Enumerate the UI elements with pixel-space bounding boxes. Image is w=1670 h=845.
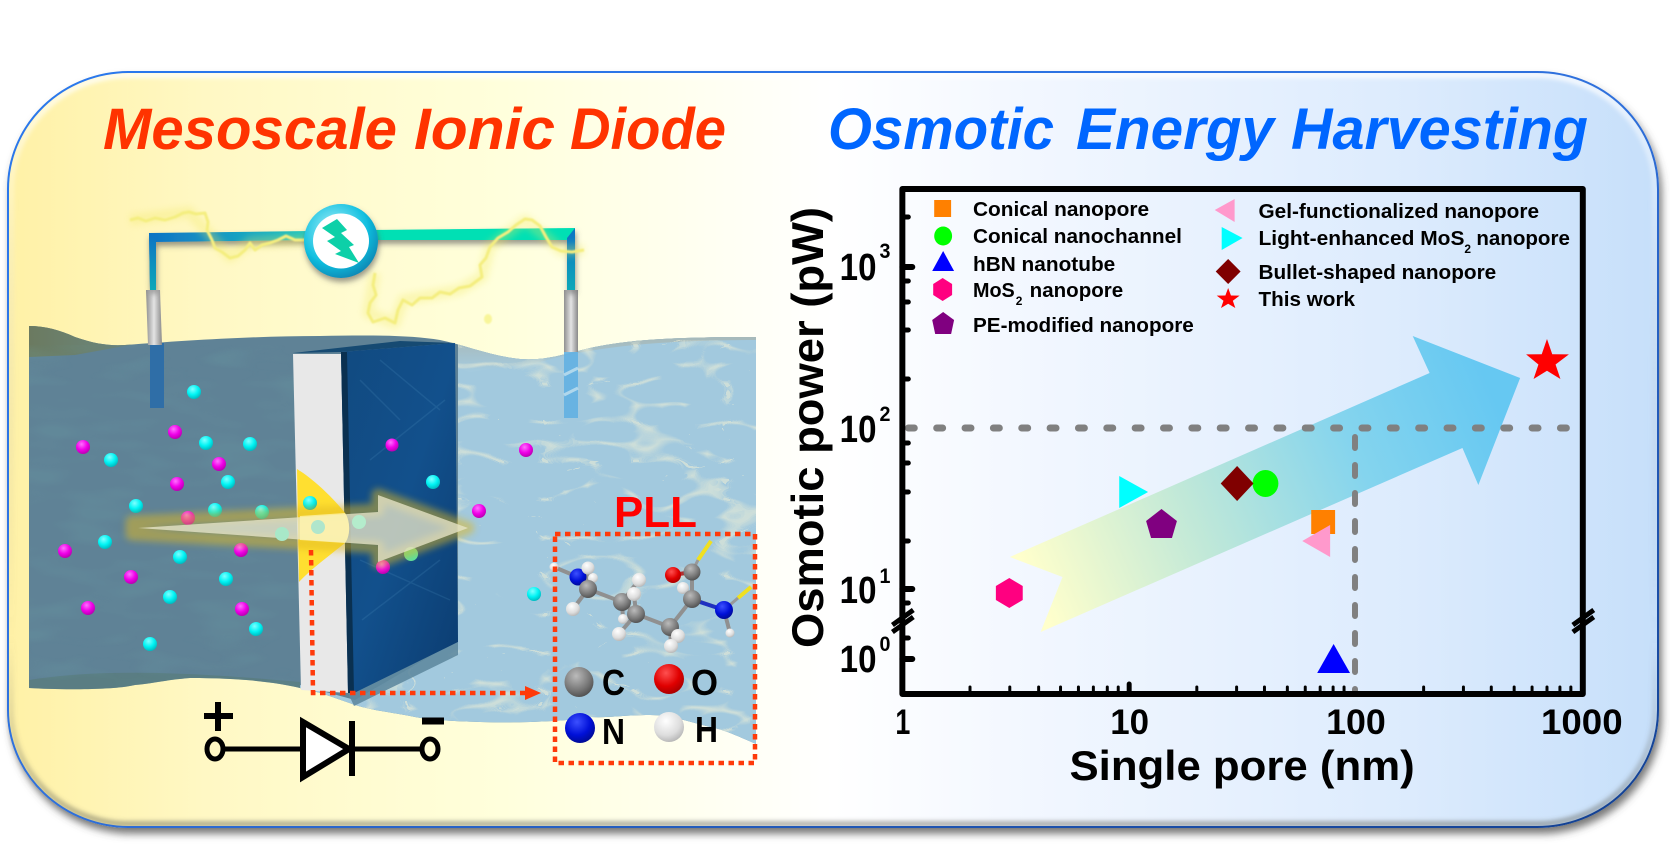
point: hBN nanotube — [1317, 644, 1350, 673]
legend: light-enhanced MoS2 nanopore: 2 — [1464, 242, 1471, 256]
atom legend: H — [695, 709, 718, 750]
point: conical nanochannel — [1253, 470, 1278, 497]
point: PE-modified — [1146, 509, 1177, 538]
y tick labels: 3 — [879, 240, 890, 263]
data points — [996, 339, 1569, 673]
legend: gel-functionalized nanopore: Gel-functionalized nanopore — [1258, 201, 1539, 223]
y axis title: Osmotic power (pW) — [782, 207, 833, 648]
title: Osmotic Energy Harvesting: Energy — [1076, 97, 1277, 162]
dotted pointer arrow — [311, 550, 541, 700]
red dotted box — [555, 534, 755, 763]
x tick labels: 1000 — [1541, 703, 1623, 742]
ion particles — [58, 385, 541, 651]
legend: MoS2 nanopore: 2 — [1016, 294, 1023, 308]
axis ticks — [902, 217, 1571, 694]
electrode left — [146, 290, 164, 408]
legend: conical nanochannel: Conical nanochannel — [973, 226, 1182, 248]
point: this work star — [1526, 339, 1569, 379]
legend: light-enhanced MoS2 nanopore — [1222, 227, 1570, 256]
glowing yellow current traces — [130, 212, 584, 324]
title: Osmotic Energy Harvesting — [828, 97, 1588, 162]
panel: osmotic power chart — [782, 189, 1623, 789]
y tick labels: 1 — [879, 565, 891, 588]
diode symbol — [204, 702, 444, 777]
point: MoS2 nanopore — [996, 578, 1023, 608]
y tick labels: 10 — [840, 570, 876, 612]
circuit wire — [149, 228, 575, 290]
legend: light-enhanced MoS2 nanopore: nanopore — [1476, 228, 1570, 250]
legend: MoS2 nanopore: MoS — [973, 280, 1015, 302]
PLL molecule — [550, 541, 751, 653]
title: Mesoscale Ionic Diode: Ionic — [414, 97, 555, 162]
legend: light-enhanced MoS2 nanopore: Light-enhanced MoS — [1258, 228, 1464, 250]
y tick labels: 2 — [879, 403, 890, 426]
legend: conical nanopore: Conical nanopore — [973, 199, 1149, 221]
ion flow arrow — [132, 495, 468, 562]
y tick labels: 10 — [840, 639, 876, 681]
atom legend: C — [602, 662, 625, 703]
plot frame — [902, 189, 1583, 694]
point: light-enhanced MoS2 — [1119, 476, 1148, 508]
x tick labels — [895, 703, 1623, 742]
atom legend — [564, 662, 718, 752]
legend: hBN nanotube: hBN nanotube — [973, 254, 1115, 276]
legend: this work — [1217, 288, 1356, 311]
PLL heading: PLL — [614, 488, 697, 537]
point: conical nanopore — [1311, 510, 1335, 534]
atom legend: N — [602, 711, 625, 752]
point: bullet-shaped — [1221, 466, 1254, 501]
electrode right — [564, 290, 578, 418]
x tick labels: 10 — [1110, 703, 1149, 742]
y tick labels: 10 — [840, 247, 876, 289]
axis breaks — [892, 610, 1594, 632]
y tick labels — [840, 240, 891, 681]
y tick labels: 0 — [879, 633, 890, 656]
meter with lightning bolt icon — [304, 204, 378, 278]
title: Mesoscale Ionic Diode — [103, 97, 726, 162]
legend: hBN nanotube — [932, 251, 1115, 276]
legend: bullet-shaped nanopore: Bullet-shaped nanopore — [1258, 262, 1496, 284]
point: gel-functionalized — [1302, 525, 1330, 557]
y tick labels: 10 — [840, 409, 876, 451]
yellow pore cone — [297, 469, 349, 582]
title: Mesoscale Ionic Diode: Diode — [570, 97, 726, 162]
legend: PE-modified nanopore: PE-modified nanopore — [973, 315, 1194, 337]
trend arrow — [1010, 336, 1520, 632]
membrane wall — [293, 341, 458, 706]
legend: this work: This work — [1258, 289, 1356, 311]
water tank — [29, 320, 764, 750]
title: Mesoscale Ionic Diode: Mesoscale — [103, 97, 397, 162]
title: Osmotic Energy Harvesting: Harvesting — [1291, 97, 1588, 162]
panel: ionic diode illustration — [29, 204, 764, 777]
reference dashed lines — [908, 428, 1574, 694]
legend — [932, 199, 1570, 337]
title: Osmotic Energy Harvesting: Osmotic — [828, 97, 1054, 162]
x tick labels: 100 — [1326, 703, 1386, 742]
x tick labels: 1 — [895, 703, 910, 742]
legend: MoS2 nanopore — [933, 278, 1123, 308]
x axis title: Single pore (nm) — [1069, 742, 1415, 789]
atom legend: O — [691, 662, 718, 703]
legend: MoS2 nanopore: nanopore — [1030, 280, 1123, 302]
